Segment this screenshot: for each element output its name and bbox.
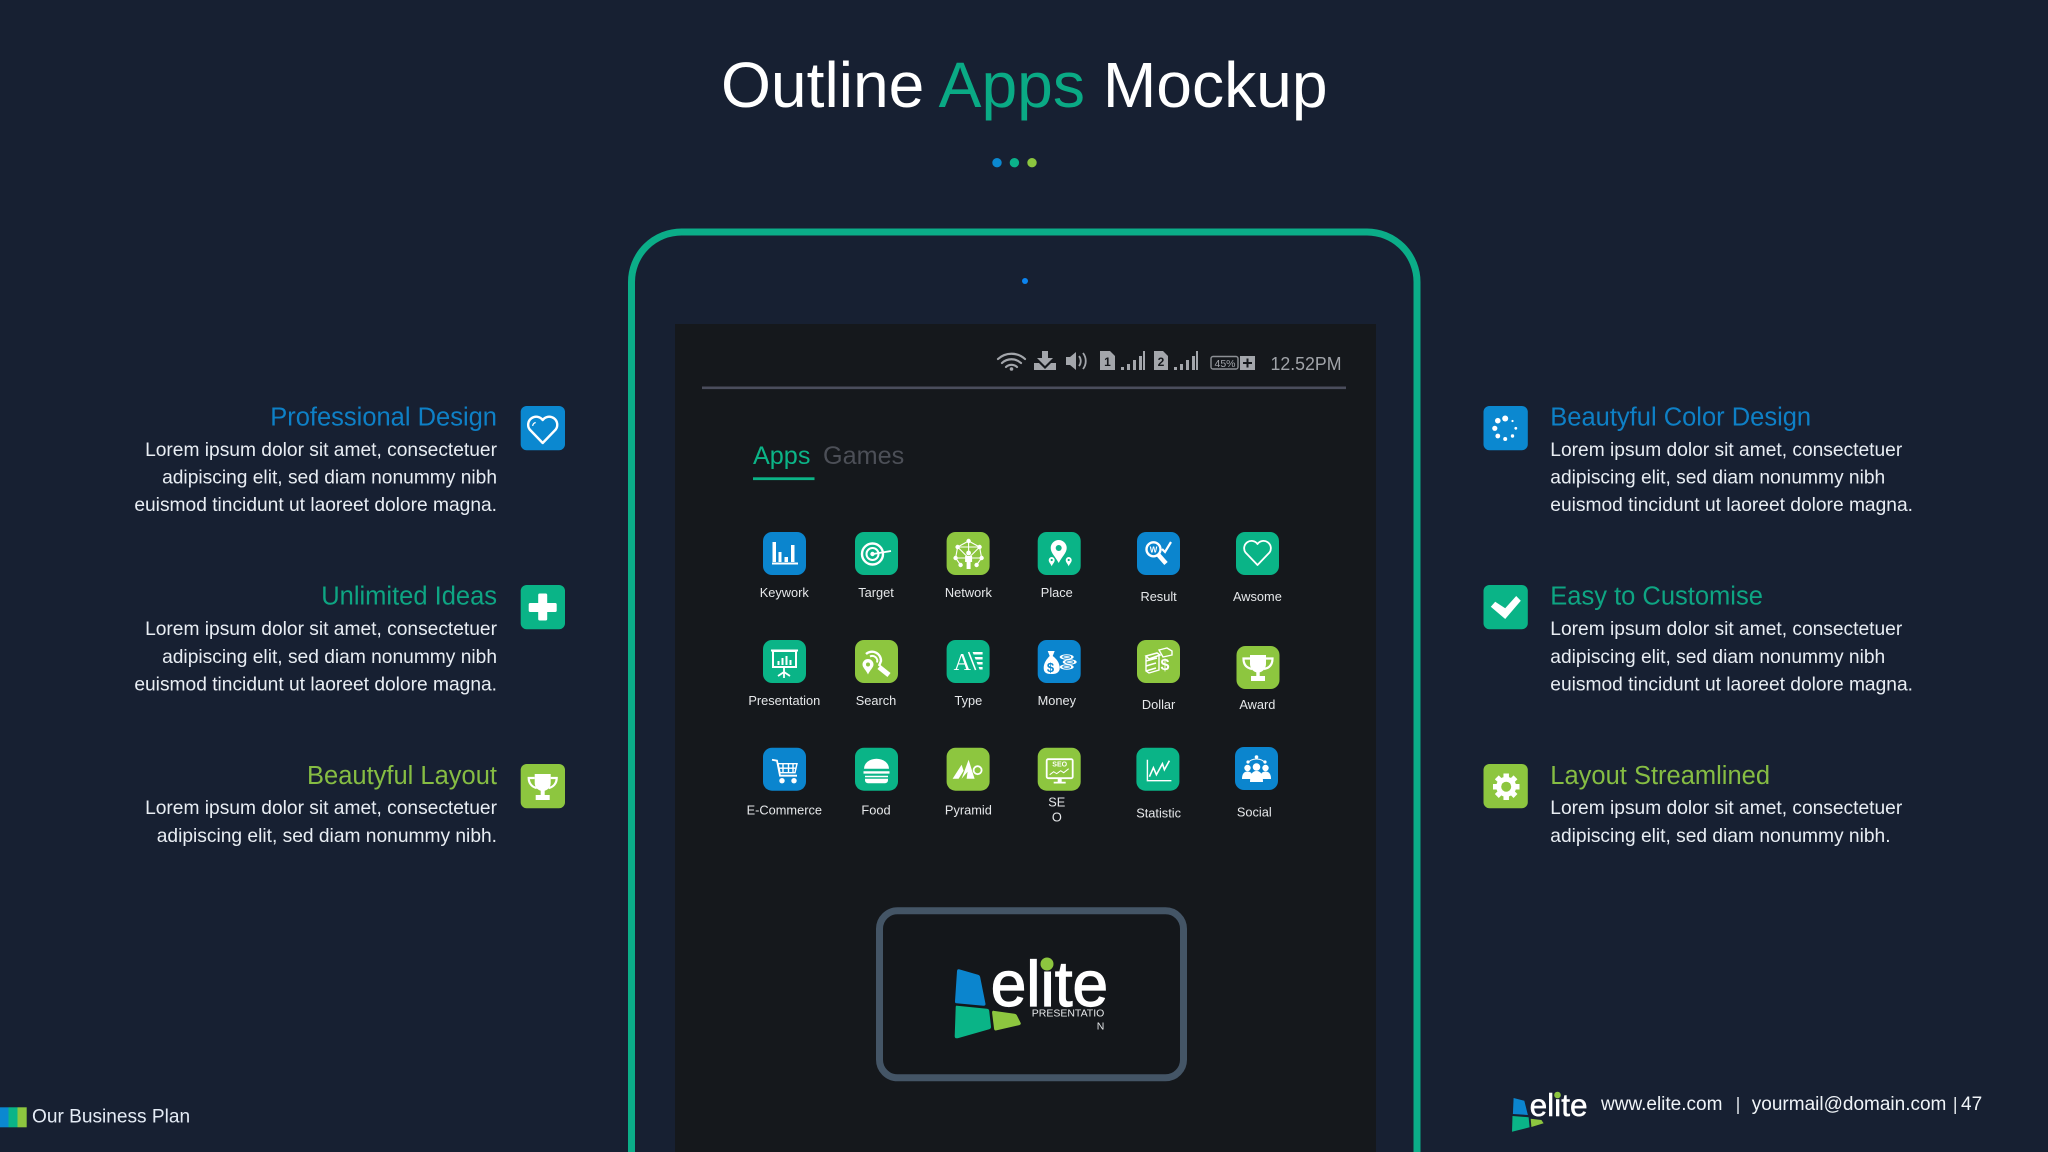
feature: beautyful layout: Beautyful Layout bbox=[307, 762, 497, 790]
app grid bbox=[747, 532, 1282, 825]
feature: unlimited ideas bbox=[134, 583, 565, 695]
app: keywork bbox=[760, 532, 809, 600]
logo subtitle: PRESENTATIO bbox=[1032, 1008, 1104, 1020]
app: result: Result bbox=[1140, 589, 1177, 604]
feature: unlimited ideas: Unlimited Ideas bbox=[321, 583, 497, 611]
icon: trophy bbox=[521, 764, 565, 808]
app: food: Food bbox=[861, 803, 891, 818]
color bar bbox=[0, 1107, 27, 1127]
tablet screen bbox=[675, 324, 1376, 1152]
app: money: Money bbox=[1038, 693, 1077, 708]
app: result: W bbox=[1150, 545, 1158, 554]
app: seo: SE bbox=[1048, 795, 1065, 810]
app: presentation bbox=[748, 640, 820, 708]
feature: layout streamlined bbox=[1484, 762, 1903, 847]
feature: unlimited ideas: Lorem ipsum dolor sit amet, consectetuer bbox=[145, 619, 498, 640]
feature: beautyful color design: euismod tincidunt ut laoreet dolore magna. bbox=[1550, 495, 1913, 516]
app: awsome: Awsome bbox=[1233, 589, 1282, 604]
status bar icons bbox=[998, 351, 1255, 371]
feature: beautyful layout: adipiscing elit, sed diam nonummy nibh. bbox=[157, 826, 497, 847]
app: target bbox=[855, 532, 898, 600]
footer: contact line: yourmail@domain.com bbox=[1752, 1094, 1946, 1115]
title: Outline Apps Mockup bbox=[721, 49, 1328, 121]
app: network bbox=[945, 532, 992, 600]
status bar icons: 45% bbox=[1214, 358, 1236, 370]
app: award bbox=[1236, 646, 1280, 712]
feature: beautyful color design: adipiscing elit, sed diam nonummy nibh bbox=[1550, 468, 1885, 489]
app: social bbox=[1235, 747, 1278, 820]
feature: easy to customise: adipiscing elit, sed diam nonummy nibh bbox=[1550, 647, 1885, 668]
logo subtitle bbox=[1032, 1008, 1104, 1032]
feature: professional design: euismod tincidunt ut laoreet dolore magna. bbox=[134, 495, 497, 516]
footer: contact line: 47 bbox=[1961, 1094, 1982, 1115]
app: search bbox=[855, 640, 898, 708]
feature: layout streamlined: adipiscing elit, sed diam nonummy nibh. bbox=[1550, 826, 1891, 847]
app: presentation: Presentation bbox=[748, 693, 820, 708]
icon: gear bbox=[1484, 764, 1528, 808]
app: seo: SEO bbox=[1052, 762, 1068, 769]
app: dollar: $ bbox=[1161, 657, 1170, 674]
logo card bbox=[880, 911, 1184, 1078]
feature: unlimited ideas: euismod tincidunt ut laoreet dolore magna. bbox=[134, 674, 497, 695]
footer: logo: elite bbox=[1530, 1087, 1588, 1123]
app: money bbox=[1038, 640, 1081, 708]
title dots bbox=[992, 158, 1037, 167]
feature: professional design: Lorem ipsum dolor sit amet, consectetuer bbox=[145, 440, 498, 461]
footer: section label: Our Business Plan bbox=[32, 1106, 190, 1127]
status bar icons: 2 bbox=[1158, 355, 1165, 369]
status bar icons: 1 bbox=[1104, 355, 1111, 369]
elite logo bbox=[955, 948, 1108, 1038]
feature: unlimited ideas: adipiscing elit, sed diam nonummy nibh bbox=[162, 647, 497, 668]
feature: professional design: Professional Design bbox=[270, 404, 497, 432]
app: result bbox=[1137, 532, 1180, 604]
feature: beautyful color design: Beautyful Color Design bbox=[1550, 404, 1811, 432]
app: e-commerce bbox=[747, 748, 822, 818]
feature: beautyful color design: Lorem ipsum dolor sit amet, consectetuer bbox=[1550, 440, 1903, 461]
elite logo: elite bbox=[991, 948, 1108, 1020]
app: target: Target bbox=[858, 585, 894, 600]
feature: easy to customise: Lorem ipsum dolor sit amet, consectetuer bbox=[1550, 619, 1903, 640]
status time: 12.52PM bbox=[1270, 354, 1342, 374]
tablet mockup bbox=[632, 232, 1417, 1152]
icon: check bbox=[1484, 585, 1528, 629]
feature: beautyful layout bbox=[145, 762, 565, 847]
feature: easy to customise bbox=[1484, 583, 1913, 695]
app: seo bbox=[1038, 748, 1081, 825]
feature: professional design bbox=[134, 404, 565, 516]
feature: beautyful layout: Lorem ipsum dolor sit amet, consectetuer bbox=[145, 798, 498, 819]
footer: contact line: www.elite.com bbox=[1600, 1094, 1722, 1115]
app: e-commerce: E-Commerce bbox=[747, 803, 822, 818]
icon: plus bbox=[521, 585, 565, 629]
app: dollar bbox=[1137, 640, 1180, 712]
app: statistic: Statistic bbox=[1136, 805, 1182, 820]
logo subtitle: N bbox=[1097, 1020, 1104, 1032]
camera dot bbox=[1022, 278, 1028, 284]
tab: games: Games bbox=[823, 442, 904, 470]
feature: easy to customise: euismod tincidunt ut laoreet dolore magna. bbox=[1550, 674, 1913, 695]
app: type: A bbox=[954, 650, 972, 676]
app: seo: O bbox=[1052, 810, 1062, 825]
app: pyramid bbox=[945, 748, 992, 818]
app: statistic bbox=[1136, 748, 1182, 820]
app: award: Award bbox=[1239, 697, 1275, 712]
icon: heart bbox=[521, 406, 565, 450]
tablet frame bbox=[632, 232, 1417, 1152]
tab: apps bbox=[753, 442, 814, 480]
status divider bbox=[702, 386, 1346, 389]
feature: layout streamlined: Layout Streamlined bbox=[1550, 762, 1770, 790]
feature: easy to customise: Easy to Customise bbox=[1550, 583, 1763, 611]
app: awsome bbox=[1233, 532, 1282, 604]
icon: spinner bbox=[1484, 406, 1528, 450]
app: place bbox=[1038, 532, 1081, 600]
app: social: Social bbox=[1237, 805, 1272, 820]
app: type: Type bbox=[955, 693, 982, 708]
app: keywork: Keywork bbox=[760, 585, 809, 600]
app: food bbox=[855, 748, 898, 818]
app: type bbox=[947, 640, 990, 708]
footer: contact line bbox=[1600, 1094, 1982, 1115]
app: money: $ bbox=[1047, 660, 1055, 675]
app: place: Place bbox=[1041, 585, 1073, 600]
feature: professional design: adipiscing elit, sed diam nonummy nibh bbox=[162, 468, 497, 489]
app: dollar: Dollar bbox=[1142, 697, 1176, 712]
app: search: Search bbox=[856, 693, 896, 708]
app: pyramid: Pyramid bbox=[945, 803, 992, 818]
footer: logo bbox=[1512, 1087, 1588, 1132]
tab: apps: Apps bbox=[753, 442, 810, 470]
app: network: Network bbox=[945, 585, 992, 600]
feature: layout streamlined: Lorem ipsum dolor sit amet, consectetuer bbox=[1550, 798, 1903, 819]
feature: beautyful color design bbox=[1484, 404, 1913, 516]
